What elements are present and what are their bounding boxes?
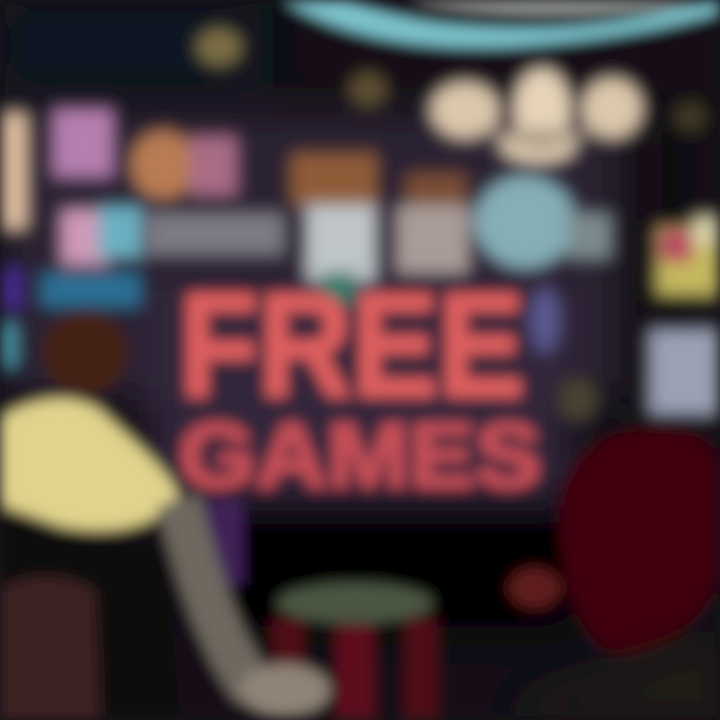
bottom right floor: [510, 640, 720, 720]
sign side accents: [529, 286, 598, 422]
right slot machine: [648, 215, 720, 416]
person seated from behind: [0, 310, 330, 720]
subheading: GAMES: GAMES: [179, 405, 541, 507]
head: [43, 310, 127, 394]
stool: [272, 583, 437, 720]
shirt: [0, 399, 178, 530]
chair upholstery: [0, 577, 100, 720]
red armchair: [559, 428, 720, 655]
centre slot machine screens: [145, 152, 612, 306]
ceiling lights: [195, 27, 708, 133]
sign: FREE GAMES: [179, 263, 541, 507]
purple lower panel: [205, 500, 243, 585]
chair back: [0, 510, 180, 720]
ceiling ring: pale inner band: [410, 0, 700, 13]
chandelier: [429, 66, 644, 165]
hand on stand: [240, 664, 330, 716]
ceiling ring: cyan arc: [285, 0, 720, 47]
heading: FREE: FREE: [180, 263, 524, 428]
left slot machine screens: [0, 108, 238, 368]
arm: [178, 500, 255, 690]
side table glow: [509, 568, 561, 608]
